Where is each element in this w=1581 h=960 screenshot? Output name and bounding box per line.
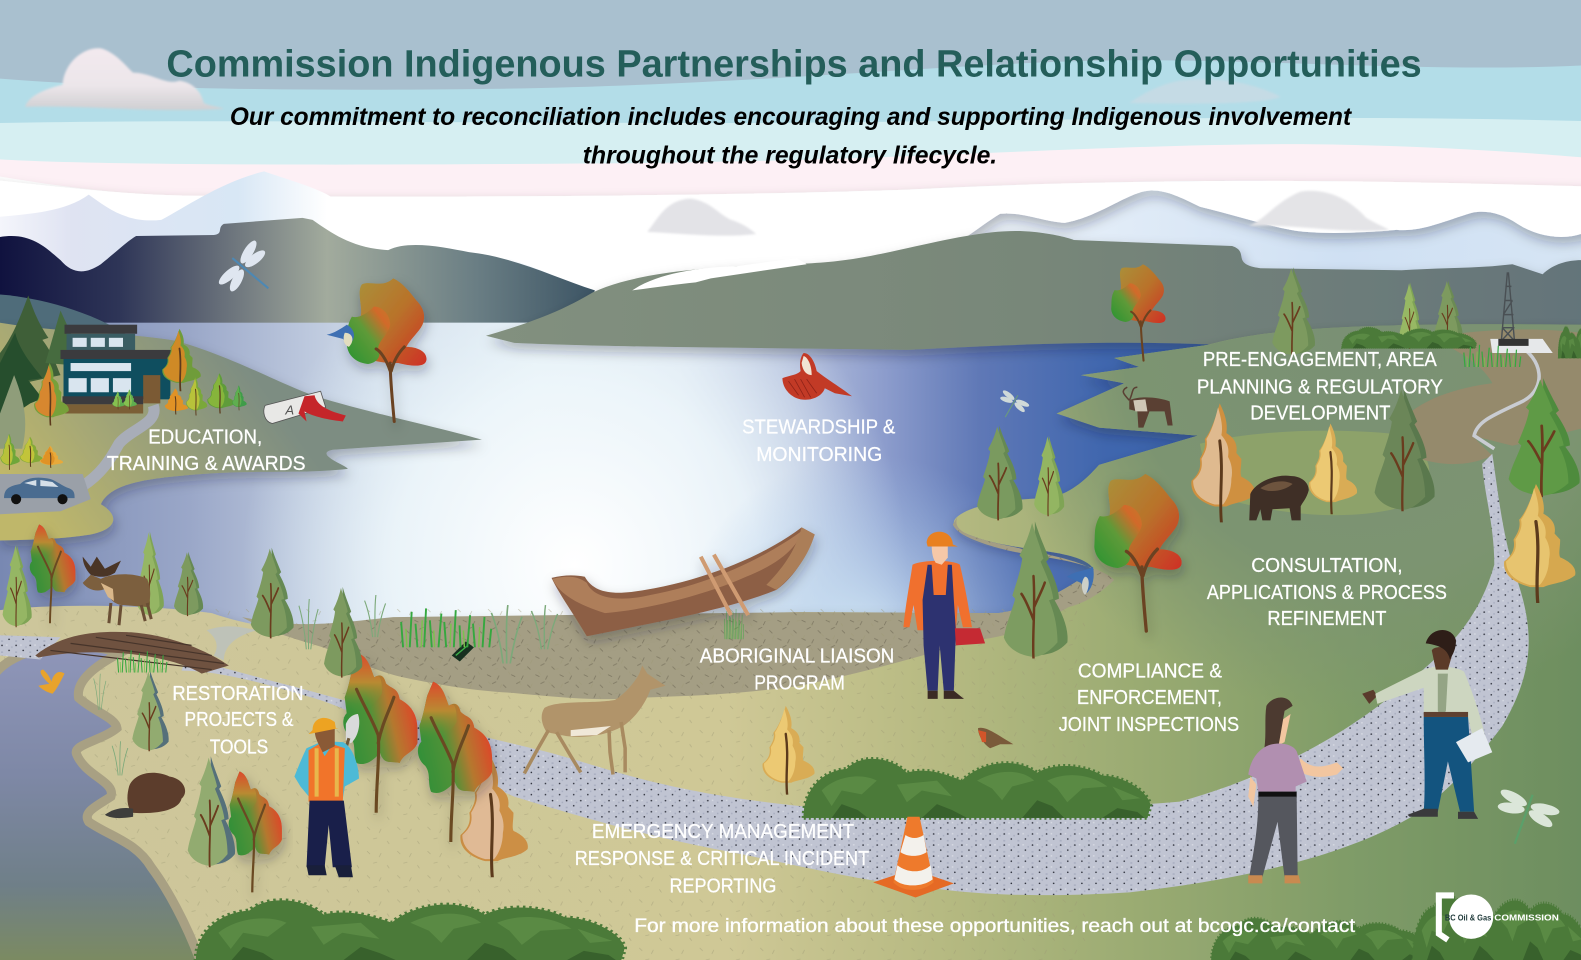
logo: [1439, 894, 1559, 940]
cloud top left: [25, 48, 224, 110]
label: aboriginal liaison: PROGRAM: [754, 673, 845, 695]
man in overalls with toolbox: [903, 532, 985, 699]
butterfly: [38, 670, 65, 694]
gravel path: [181, 454, 1529, 895]
label: education: EDUCATION,: [148, 427, 262, 449]
label: compliance: JOINT INSPECTIONS: [1059, 714, 1239, 736]
bear: [1249, 476, 1309, 520]
tree: yellow leaf: [1309, 424, 1357, 514]
beetle: [452, 641, 474, 662]
tree: slim conifer two: [1434, 280, 1463, 343]
main land: [0, 324, 1581, 960]
building: [58, 325, 171, 413]
far left hill: [0, 294, 131, 424]
tree: tan leaf: [1191, 403, 1255, 522]
label: stewardship: MONITORING: [756, 444, 882, 466]
icon: scroll and ribbon: [264, 391, 346, 424]
bush: right edge: [1558, 327, 1581, 358]
label: aboriginal liaison: [700, 646, 894, 695]
tree: yellow leaf lower: [762, 706, 815, 795]
tree: autumn small: [229, 771, 282, 892]
label: emergency management: REPORTING: [670, 875, 776, 897]
tree: left conifers: [3, 545, 32, 627]
grey shoreline band: [242, 516, 1114, 699]
bush: hilltop: [1342, 327, 1476, 348]
label: stewardship: STEWARDSHIP &: [742, 417, 896, 439]
tree: conifer small: [174, 552, 203, 616]
construction worker with shovel: [294, 714, 359, 877]
tree: yellow leaf right: [1504, 484, 1575, 603]
tree: big maple: [1094, 474, 1182, 631]
logo: COMMISSION: [1494, 913, 1559, 923]
beaver: [105, 773, 185, 818]
label: pre-engagement: PLANNING & REGULATORY: [1197, 376, 1443, 398]
tree: slim conifer: [1399, 282, 1422, 349]
label: aboriginal liaison: ABORIGINAL LIAISON: [700, 646, 894, 668]
pale meadow: [1200, 431, 1429, 515]
label: compliance: COMPLIANCE &: [1078, 661, 1223, 683]
icon: car: [4, 478, 75, 504]
subtitle: throughout the regulatory lifecycle.: [583, 141, 997, 169]
moose: [83, 557, 151, 625]
tree: autumn two: [418, 682, 492, 842]
tree: shore conifer: [251, 548, 294, 638]
tree: autumn far left: [30, 524, 75, 623]
left peninsula: [0, 323, 482, 541]
traffic cone: [873, 817, 954, 897]
dirt road right: [1474, 345, 1539, 449]
car park: [0, 474, 91, 514]
footer contact line: For more information about these opportunities, reach out at bcogc.ca/contact: [634, 916, 1356, 937]
upper green land: [1008, 324, 1581, 726]
snow mountains left: [0, 171, 595, 343]
cloud behind title: [1129, 79, 1281, 104]
tree: conifer behind moose: [137, 531, 164, 616]
bush: long central: [804, 759, 1150, 818]
bird: blue jay right: [1067, 567, 1094, 595]
tree: big conifer: [1004, 521, 1068, 658]
label: consultation: APPLICATIONS & PROCESS: [1207, 582, 1447, 604]
tree: grey conifer lower: [188, 756, 235, 867]
tree: shore conifer two: [324, 587, 362, 678]
left road to house: [83, 405, 154, 486]
label: emergency management: EMERGENCY MANAGEMENT: [592, 821, 854, 843]
bird flying: cardinal: [782, 353, 852, 400]
icon: drilling derrick: [1490, 272, 1553, 353]
label: restoration: [172, 683, 303, 758]
dragonfly: lake: [992, 388, 1031, 425]
right mountain: [486, 231, 1581, 363]
grass and reeds: [94, 595, 744, 775]
label: pre-engagement: DEVELOPMENT: [1250, 402, 1390, 424]
bottom left water: [0, 647, 202, 960]
tree: far maple: [1111, 264, 1166, 361]
label: emergency management: [575, 821, 869, 897]
sand overlay: [0, 605, 1089, 960]
tree: tan leaf lower: [460, 756, 528, 877]
logo: BC Oil & Gas: [1445, 913, 1491, 923]
label: education: TRAINING & AWARDS: [107, 453, 306, 475]
dragonfly: bottom right: [1485, 784, 1563, 855]
brown dirt area: [1386, 329, 1581, 464]
caribou: [1123, 387, 1173, 428]
lake: [0, 323, 1581, 666]
tree: conifers on island: [977, 426, 1023, 520]
deer: [524, 666, 665, 774]
white cloud layer: [0, 176, 1581, 303]
trees behind house: [0, 295, 76, 449]
bush: bottom right one: [1211, 918, 1431, 960]
canoe: [552, 527, 815, 636]
wooden bridge: [35, 632, 229, 674]
icon: scroll and ribbon: A: [284, 402, 294, 417]
woman in purple: [1248, 698, 1343, 883]
subtitle: [230, 103, 1353, 169]
label: compliance: [1059, 661, 1239, 736]
tree: left maple lake: [347, 278, 427, 422]
bush: bottom left: [196, 900, 625, 960]
label: education: [107, 427, 306, 475]
title: Commission Indigenous Partnerships and Relationship Opportunities: [166, 43, 1422, 86]
tree: grey conifer: [132, 671, 169, 751]
bird: blue jay left: [327, 325, 354, 347]
subtitle: Our commitment to reconciliation includes encouraging and supporting Indigenous involvement: [230, 103, 1353, 131]
stream ford: [207, 626, 257, 661]
robin: [978, 728, 1013, 748]
label: pre-engagement: PRE-ENGAGEMENT, AREA: [1203, 349, 1437, 371]
mountain snow patch: [632, 258, 807, 290]
label: compliance: ENFORCEMENT,: [1077, 687, 1222, 709]
man with tie and papers: [1362, 630, 1492, 819]
label: consultation: CONSULTATION,: [1251, 555, 1403, 577]
tree: autumn one: [343, 653, 417, 813]
label: restoration: TOOLS: [210, 736, 268, 758]
cloud right: [1248, 191, 1389, 231]
tree: slim conifer island: [1034, 436, 1064, 516]
house shrubs: [0, 329, 247, 470]
gravel left segment: [0, 635, 60, 659]
tree: far conifer: [1272, 267, 1315, 356]
tree: dark conifer: [1375, 388, 1435, 511]
dark mountain: [0, 218, 595, 328]
bush: bottom right two: [1413, 896, 1581, 960]
grass by derrick: [1464, 345, 1521, 367]
label: stewardship: [742, 417, 896, 466]
label: emergency management: RESPONSE & CRITICAL INCIDENT: [575, 848, 869, 870]
label: consultation: [1207, 555, 1447, 630]
label: restoration: PROJECTS &: [185, 709, 294, 731]
cloud centre: [647, 199, 756, 236]
label: pre-engagement: [1197, 349, 1443, 424]
label: consultation: REFINEMENT: [1267, 608, 1386, 630]
label: restoration: RESTORATION: [172, 683, 303, 705]
tree: green broadleaf: [1509, 378, 1580, 497]
dragonfly: top left: [214, 236, 287, 310]
